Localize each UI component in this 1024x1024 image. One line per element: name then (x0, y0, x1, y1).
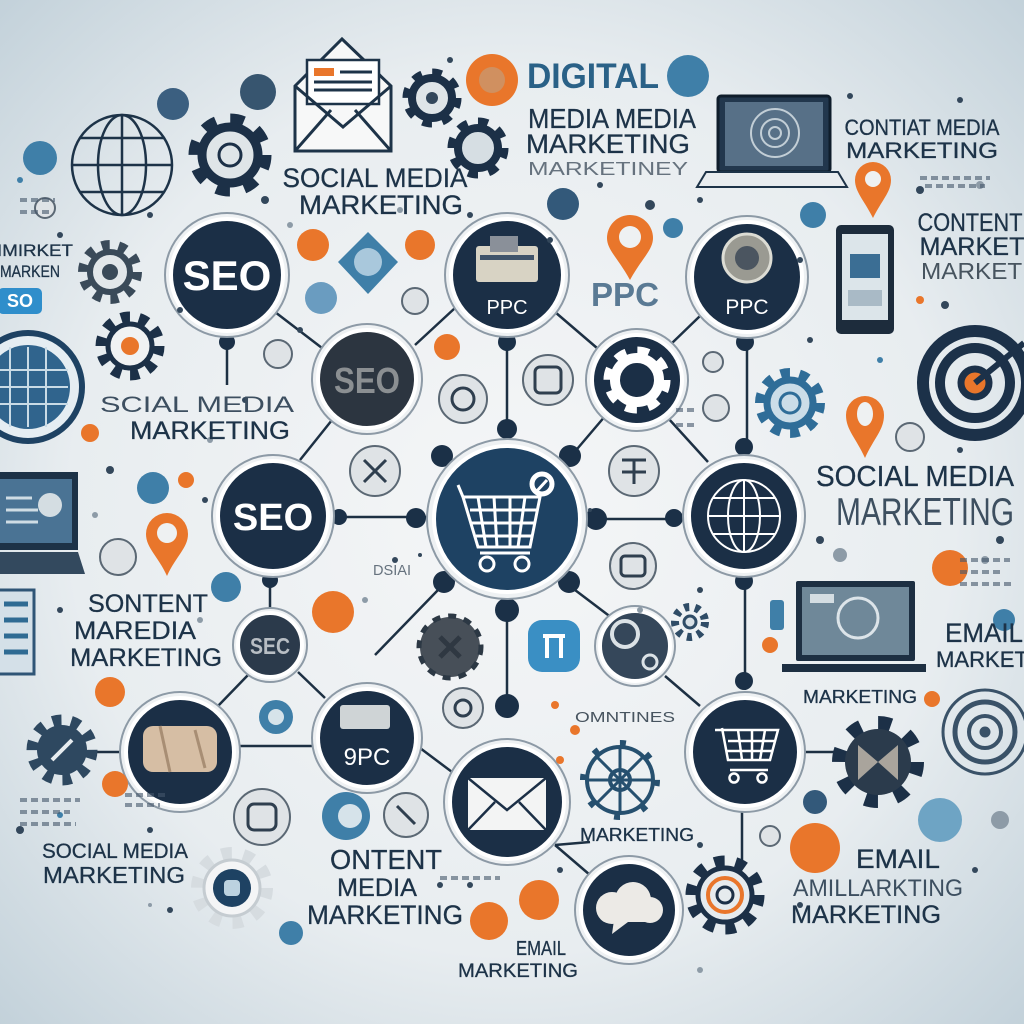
label: marketing small right: MARKETING (803, 687, 917, 707)
label: content market right: MARKET (920, 233, 1024, 261)
icon: gear bottom right (692, 862, 758, 928)
node: central shopping cart (427, 439, 587, 599)
node: PPC centre top (445, 213, 569, 337)
label: content media left: SONTENT (88, 590, 208, 618)
icon: target lower right (943, 690, 1024, 774)
label: email market right: EMAIL (945, 618, 1023, 648)
icon: gear right blue (761, 374, 819, 432)
icon: globe left (0, 333, 82, 441)
label: digital small: DSIAI (373, 562, 411, 579)
icon: gear left B (101, 317, 159, 375)
label: content media left: MAREDIA (74, 617, 196, 645)
node: 9PC (312, 683, 422, 793)
node: SEO small: SEC (250, 633, 290, 659)
connector lines (90, 308, 835, 875)
label: email marketing bottom centre (458, 938, 578, 982)
icon: gear left lower (32, 720, 92, 780)
icon: gear small right (675, 607, 705, 637)
badges: outline (35, 198, 924, 846)
heading: digital media marketing (526, 57, 696, 179)
icon: pin right (846, 396, 884, 458)
node: parcel (120, 692, 240, 812)
label: content media bottom: ONTENT (330, 844, 442, 875)
label: PPC: PPC (591, 276, 659, 313)
label: content media bottom (307, 844, 463, 930)
node: PPC centre top: PPC (486, 297, 528, 319)
icon: laptop right (782, 581, 926, 672)
gear icons (32, 74, 917, 928)
label: market left (0, 241, 73, 311)
node: 9PC: 9PC (344, 744, 390, 771)
node: cloud (575, 856, 683, 964)
icon: gear bottom left (198, 854, 266, 922)
icon: ship wheel (583, 743, 657, 817)
label: social media top (282, 163, 468, 220)
label: social media right (816, 461, 1015, 534)
node: SEO middle: SEO (233, 497, 313, 539)
icon: dark dial (419, 616, 481, 678)
label: social media bottom left: SOCIAL MEDIA (42, 840, 188, 863)
label: email market right (936, 618, 1024, 672)
icon: pin left (146, 513, 188, 576)
label: content market right: MARKETI (921, 258, 1024, 284)
node: SEO middle (212, 455, 334, 577)
node: PPC right (686, 216, 808, 338)
icon: phone (836, 225, 894, 334)
node: SEO small (233, 608, 307, 682)
icon: gear lower right (839, 723, 917, 801)
icon: pin top (607, 215, 653, 280)
label: content media bottom: MEDIA (337, 874, 417, 902)
label: email marketing bottom centre: EMAIL (516, 938, 566, 960)
label: email marketing bottom centre: MARKETING (458, 961, 578, 982)
label: content market right (918, 209, 1024, 284)
label: social media top: MARKETING (299, 190, 463, 220)
label: contiat media: MARKETING (846, 138, 998, 163)
label: social media left (100, 392, 294, 445)
label: social media left: MARKETING (130, 417, 290, 445)
node: envelope (444, 739, 570, 865)
badges: orange (81, 54, 968, 940)
label: market left: SO (7, 291, 33, 311)
label: contiat media: CONTIAT MEDIA (844, 115, 1000, 140)
node: SEO top (165, 213, 289, 337)
label: social media top: SOCIAL MEDIA (282, 163, 468, 193)
connector end dots (219, 333, 754, 718)
heading: digital media marketing: MARKETING (526, 129, 690, 159)
label: contiat media (844, 115, 1000, 163)
heading: digital media marketing: MARKETINEY (528, 159, 688, 179)
map pins (146, 162, 891, 576)
label: social media right: SOCIAL MEDIA (816, 461, 1015, 493)
label: social media bottom left: MARKETING (43, 862, 185, 888)
label: market left: MARKEN (0, 262, 60, 281)
icon: laptop top right (697, 96, 847, 187)
node: SEO top: SEO (183, 252, 271, 299)
label: social media bottom left (42, 840, 188, 888)
node: cart lower right (685, 692, 805, 812)
node: SEO ghost (312, 324, 422, 434)
icon: gear top B (453, 123, 503, 173)
label: omntines: OMNTINES (575, 709, 675, 726)
icon: gear left A (83, 245, 137, 299)
node: PPC right: PPC (725, 296, 769, 319)
label: marketing centre: MARKETING (580, 825, 694, 845)
icon: laptop left (0, 472, 85, 574)
node: lens (595, 606, 675, 686)
node: gear (586, 329, 688, 431)
icon: building left (0, 590, 34, 674)
icon: envelope top (295, 39, 391, 151)
icon: pin top right (855, 162, 891, 218)
node: globe (683, 455, 805, 577)
label: content media bottom: MARKETING (307, 900, 463, 930)
icon: gear top left (196, 121, 264, 189)
icon: globe top left (72, 115, 172, 215)
icon: cart (458, 474, 552, 571)
label: content media left: MARKETING (70, 644, 222, 672)
heading: digital media marketing: MEDIA MEDIA (528, 103, 696, 134)
icon: gear top A (408, 74, 456, 122)
node: SEO ghost: SEO (334, 360, 400, 401)
label: email marketing bottom right: MARKETING (791, 901, 941, 929)
label: email marketing bottom right (791, 844, 963, 929)
label: email marketing bottom right: AMILLARKTING (793, 875, 963, 902)
label: social media left: SCIAL MEDIA (100, 392, 294, 417)
label: email marketing bottom right: EMAIL (856, 844, 940, 874)
icon: target right (923, 331, 1024, 435)
heading: digital media marketing: DIGITAL (527, 57, 659, 96)
label: content media left (70, 590, 222, 672)
